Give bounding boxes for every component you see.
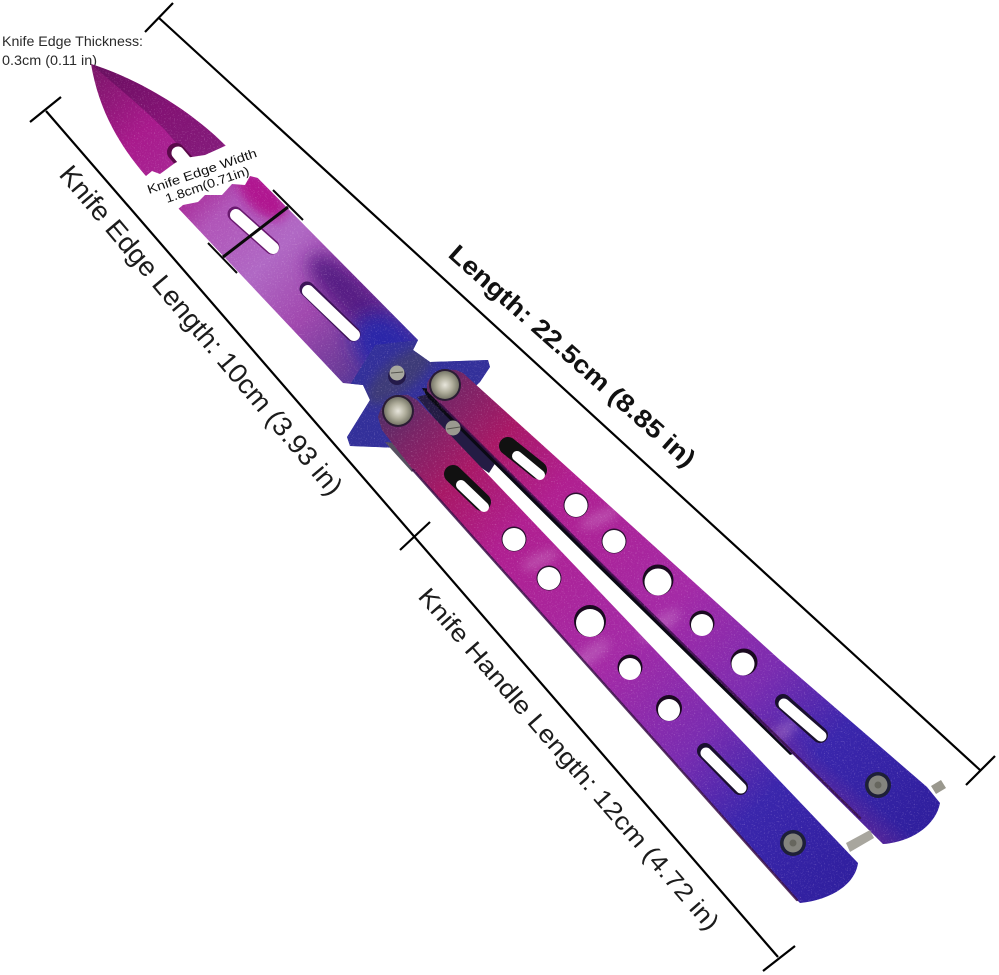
pivot bolts bbox=[382, 369, 461, 427]
right handle end tint bbox=[760, 700, 940, 844]
left handle holes bbox=[502, 526, 682, 721]
label: knife edge length: Knife Edge Length: 10cm (3.93 in) bbox=[53, 160, 349, 501]
dimension line: overall length bbox=[145, 3, 995, 785]
left handle end tint bbox=[680, 740, 858, 903]
label: knife edge width: 1.8cm(0.71in) bbox=[163, 164, 251, 206]
speckle texture bbox=[80, 55, 950, 915]
left handle under-edge bbox=[385, 442, 416, 472]
left handle slot 1 bbox=[453, 474, 484, 507]
right handle slot 1 bbox=[508, 446, 540, 475]
handle end screws bbox=[780, 772, 891, 856]
latch screw bbox=[446, 420, 460, 436]
blade slot 2 bbox=[235, 214, 273, 248]
label band across blade bbox=[128, 140, 265, 210]
width measure bbox=[208, 190, 303, 273]
label: knife edge width: Knife Edge Width bbox=[145, 146, 259, 197]
latch pins bbox=[846, 780, 946, 852]
left handle bbox=[378, 395, 858, 903]
blade slot 1 bbox=[176, 152, 194, 172]
label: knife edge thickness: 0.3cm (0.11 in) bbox=[2, 53, 97, 68]
right handle bbox=[427, 370, 940, 844]
left handle slot 2 bbox=[705, 751, 741, 788]
handle pale streaks bbox=[519, 502, 802, 746]
right handle holes bbox=[564, 492, 758, 676]
blade colour patches bbox=[91, 64, 490, 448]
right handle shadow bbox=[422, 388, 796, 755]
pivot screw small bbox=[388, 366, 406, 385]
knife body bbox=[80, 55, 950, 915]
plate between handles bbox=[417, 393, 496, 473]
dimension line: edge and handle length bbox=[30, 97, 795, 971]
label: knife edge thickness: Knife Edge Thickness: bbox=[2, 34, 143, 49]
label: overall length: Length: 22.5cm (8.85 in) bbox=[443, 240, 701, 473]
label: knife handle length: Knife Handle Length: 12cm (4.72 in) bbox=[412, 583, 724, 936]
blade slot 3 bbox=[307, 289, 354, 335]
right handle slot 2 bbox=[783, 702, 821, 736]
blade with guard bbox=[91, 64, 490, 448]
label: knife edge width bbox=[145, 146, 259, 206]
handle dark lower edges bbox=[413, 404, 860, 900]
